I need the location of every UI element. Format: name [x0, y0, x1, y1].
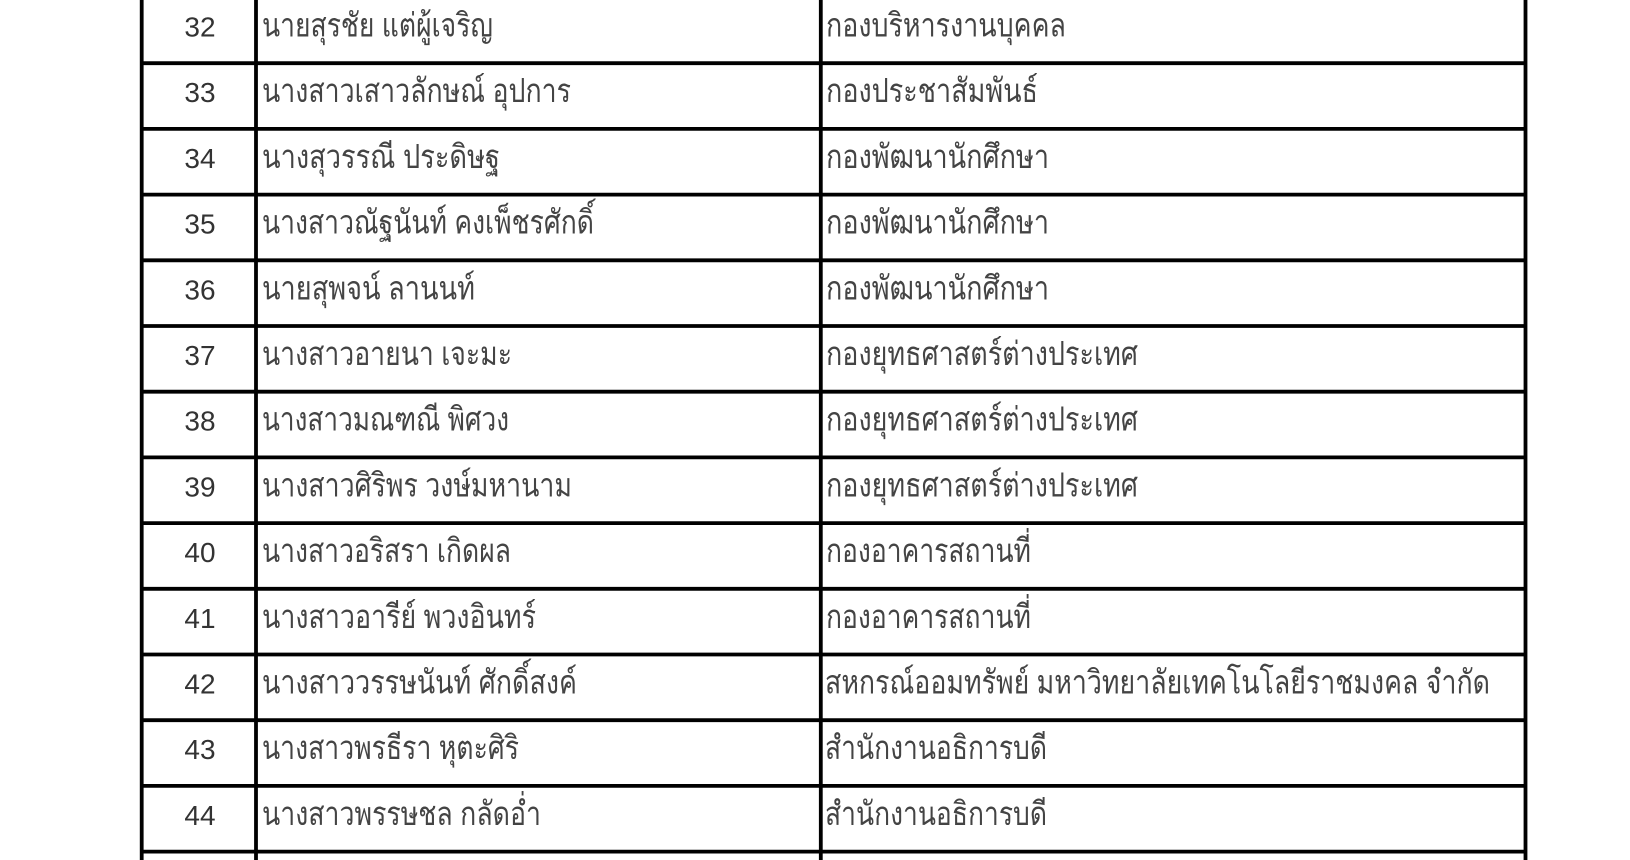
row 32: 32 [184, 12, 216, 42]
row 41: กองอาคารสถานที่ [826, 594, 1031, 635]
row 32 [184, 6, 1066, 46]
row 39 [184, 466, 1138, 505]
row 38 [184, 401, 1138, 440]
row 34: กองพัฒนานักศึกษา [826, 138, 1049, 175]
row 39: กองยุทธศาสตร์ต่างประเทศ [826, 466, 1138, 505]
row 32: นายสุรชัย แต่ผู้เจริญ [262, 6, 493, 46]
row 33: นางสาวเสาวลักษณ์ อุปการ [262, 72, 571, 111]
row 40 [184, 528, 1031, 569]
row 35: นางสาวณัฐนันท์ คงเพ็ชรศักดิ์ [262, 199, 596, 243]
row 36 [184, 269, 1049, 308]
row 37: 37 [184, 340, 216, 371]
row 38: นางสาวมณฑณี พิศวง [262, 401, 509, 438]
row 44 [184, 791, 1047, 832]
row 37: นางสาวอายนา เจะมะ [262, 335, 512, 372]
row 44: สำนักงานอธิการบดี [825, 795, 1047, 832]
row 35: 35 [184, 209, 216, 240]
row 37 [184, 335, 1138, 374]
row 34: นางสุวรรณี ประดิษฐ [262, 138, 500, 177]
row 33: 33 [184, 77, 216, 108]
row 43 [184, 729, 1047, 768]
row 39: 39 [184, 471, 216, 502]
row 36: นายสุพจน์ ลานนท์ [262, 269, 475, 308]
row 42: นางสาววรรษนันท์ ศักดิ์สงค์ [262, 658, 577, 700]
row 42: สหกรณ์ออมทรัพย์ มหาวิทยาลัยเทคโนโลยีราชมงคล จำกัด [825, 664, 1490, 700]
row 42 [184, 658, 1490, 700]
row 40: นางสาวอริสรา เกิดผล [262, 532, 511, 569]
row 41: นางสาวอารีย์ พวงอินทร์ [262, 598, 536, 635]
row 44: นางสาวพรรษชล กลัดอ่ำ [262, 791, 541, 832]
row 34: 34 [184, 143, 216, 174]
row 33 [184, 72, 1038, 111]
row 36: 36 [184, 274, 216, 305]
row 40: กองอาคารสถานที่ [826, 528, 1031, 569]
row 43: 43 [184, 734, 216, 765]
row 35 [184, 199, 1049, 243]
row 37: กองยุทธศาสตร์ต่างประเทศ [826, 335, 1138, 374]
row 41: 41 [184, 603, 216, 634]
row 38: กองยุทธศาสตร์ต่างประเทศ [826, 401, 1138, 440]
row 39: นางสาวศิริพร วงษ์มหานาม [262, 466, 572, 503]
row 38: 38 [184, 406, 216, 437]
row 32: กองบริหารงานบุคคล [826, 6, 1066, 46]
row 41 [184, 594, 1031, 635]
row 43: สำนักงานอธิการบดี [825, 729, 1047, 766]
row 43: นางสาวพรธีรา หุตะศิริ [262, 729, 519, 768]
row 34 [184, 138, 1049, 177]
row 35: กองพัฒนานักศึกษา [826, 204, 1049, 241]
row 42: 42 [184, 668, 216, 700]
row 44: 44 [184, 800, 216, 831]
row 36: กองพัฒนานักศึกษา [826, 269, 1049, 306]
row 33: กองประชาสัมพันธ์ [826, 72, 1038, 109]
row 40: 40 [184, 537, 216, 568]
